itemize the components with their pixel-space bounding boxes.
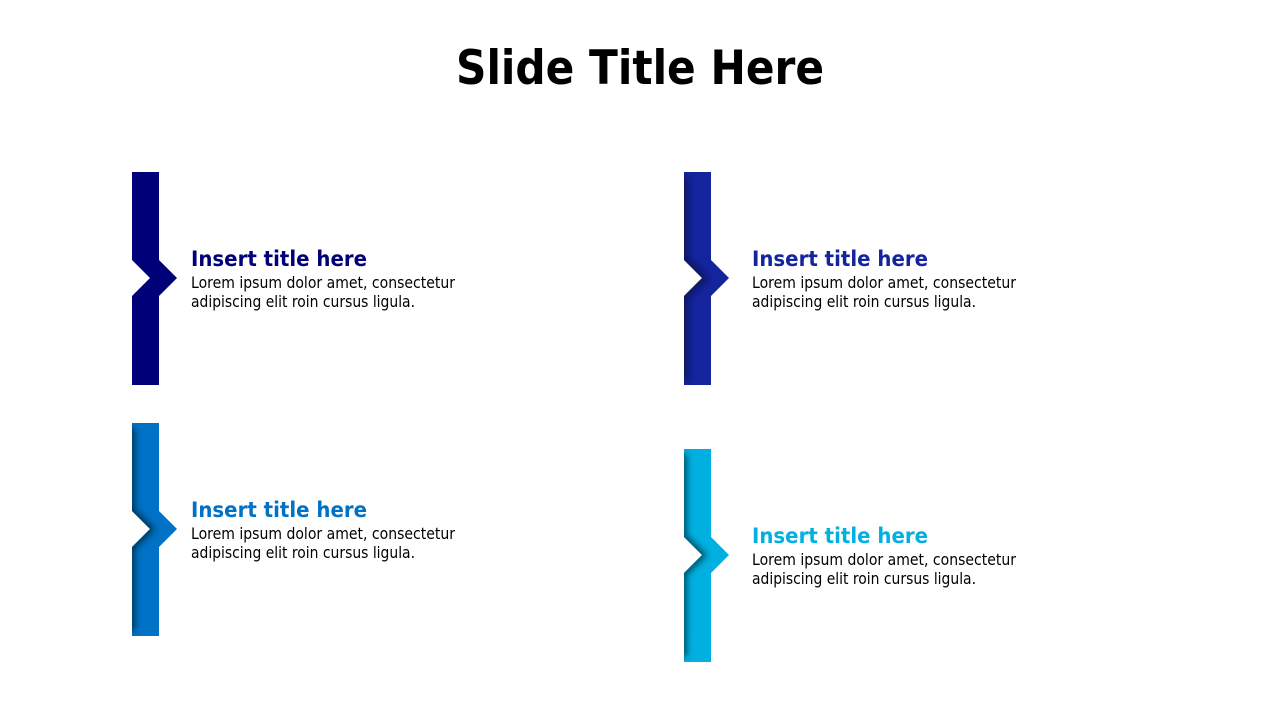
icon: indigo notched bar xyxy=(682,172,729,385)
text block: item 2: Lorem ipsum dolor amet, consectetur xyxy=(752,273,1016,292)
text block: item 3: Lorem ipsum dolor amet, consectetur xyxy=(191,524,455,543)
heading: item 3: Insert title here xyxy=(191,498,367,522)
text block: item 4: Lorem ipsum dolor amet, consectetur xyxy=(752,550,1016,569)
icon: navy notched bar xyxy=(132,172,177,385)
text block: item 3: adipiscing elit roin cursus ligula. xyxy=(191,543,415,562)
text block: item 2: adipiscing elit roin cursus ligula. xyxy=(752,292,976,311)
text block: item 1: Lorem ipsum dolor amet, consectetur xyxy=(191,273,455,292)
icon: cyan notched bar xyxy=(682,449,729,662)
panel: item 4 xyxy=(682,449,1016,662)
icon: blue notched bar xyxy=(130,423,177,636)
panel: item 2 xyxy=(682,172,1016,385)
text block: item 4: adipiscing elit roin cursus ligula. xyxy=(752,569,976,588)
heading: item 1: Insert title here xyxy=(191,247,367,271)
heading: item 4: Insert title here xyxy=(752,524,928,548)
panel: item 3 xyxy=(130,423,455,636)
panel: item 1 xyxy=(132,172,455,385)
title: Slide Title Here xyxy=(456,41,824,96)
text block: item 1: adipiscing elit roin cursus ligula. xyxy=(191,292,415,311)
heading: item 2: Insert title here xyxy=(752,247,928,271)
